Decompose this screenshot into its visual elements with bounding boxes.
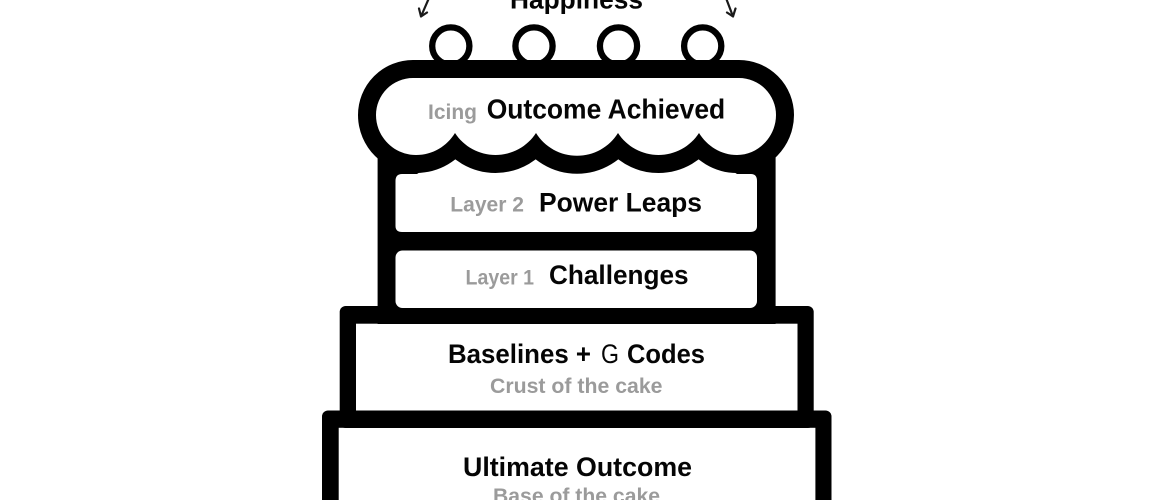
label: Challenges: Challenges [549, 260, 689, 290]
label: Layer 1: Layer 1 [466, 266, 534, 290]
panel: base of the cake [322, 410, 832, 500]
panel: cake body [378, 150, 776, 324]
label: Baselines + G Codes: Baselines + [448, 339, 591, 369]
label: Layer 2: Layer 2 [450, 194, 524, 216]
candles [432, 27, 721, 65]
label: Ultimate Outcome: Ultimate Outcome [463, 452, 692, 482]
arrow: right [726, 0, 736, 16]
label: Icing: Icing [428, 101, 477, 124]
arrow: left [419, 0, 429, 16]
label: Baselines + G Codes [448, 339, 705, 369]
panel: layer 2 [396, 150, 757, 232]
label: Baselines + G Codes: G [601, 339, 619, 369]
label: Outcome Achieved: Outcome Achieved [487, 94, 725, 124]
label: Crust of the cake: Crust of the cake [490, 375, 662, 398]
panel: icing [376, 78, 776, 156]
panel: layer 1 [396, 250, 757, 308]
label: Baselines + G Codes: Codes [627, 339, 705, 369]
panel: crust of the cake [340, 306, 814, 428]
label: Power Leaps: Power Leaps [539, 188, 702, 218]
